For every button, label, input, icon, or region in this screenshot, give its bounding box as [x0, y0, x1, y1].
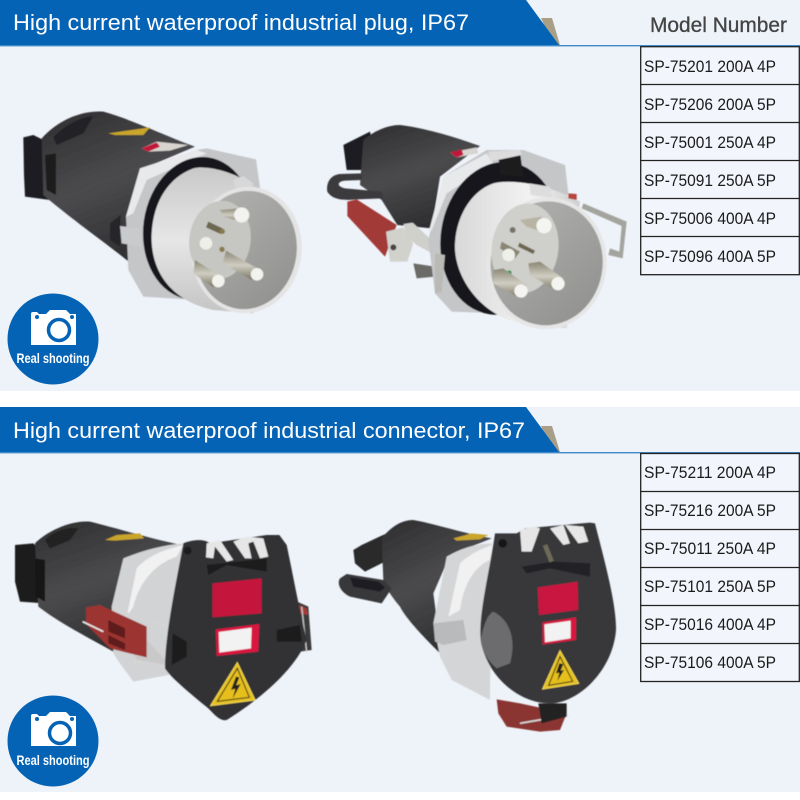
table: connector model numbers [640, 454, 800, 682]
plug photo 1 [23, 112, 310, 320]
table: plug model numbers: SP-75201 200A 4P [644, 57, 776, 76]
badge: real shooting (bottom) [8, 696, 98, 786]
table: plug model numbers: SP-75096 400A 5P [644, 247, 776, 266]
plug photo 2 [327, 125, 627, 335]
table: plug model numbers: SP-75091 250A 5P [644, 171, 776, 190]
white bottom margin [0, 792, 800, 800]
icon: camera [31, 712, 76, 746]
table: connector model numbers: SP-75106 400A 5P [644, 653, 776, 672]
badge label: Real shooting [16, 752, 90, 768]
table: connector model numbers: SP-75016 400A 4P [644, 615, 776, 634]
table: plug model numbers [640, 47, 800, 275]
white separator band [0, 391, 800, 407]
header banner: plug [0, 0, 800, 46]
table heading: Model Number: Model Number [650, 14, 787, 37]
header banner: connector [0, 407, 800, 453]
table: connector model numbers: SP-75101 250A 5P [644, 577, 776, 596]
connector photo 2 [339, 520, 616, 732]
table: plug model numbers: SP-75001 250A 4P [644, 133, 776, 152]
table: connector model numbers: SP-75211 200A 4P [644, 463, 776, 482]
badge: real shooting (top) [8, 294, 98, 384]
table: plug model numbers: SP-75006 400A 4P [644, 209, 776, 228]
heading: connector: High current waterproof industrial connector, IP67 [13, 418, 525, 443]
table: connector model numbers: SP-75011 250A 4P [644, 539, 776, 558]
icon: camera [31, 310, 76, 345]
badge label: Real shooting [16, 350, 90, 366]
table: plug model numbers: SP-75206 200A 5P [644, 95, 776, 114]
table: connector model numbers: SP-75216 200A 5P [644, 501, 776, 520]
connector photo 1 [15, 522, 312, 720]
heading: plug: High current waterproof industrial plug, IP67 [13, 10, 469, 35]
